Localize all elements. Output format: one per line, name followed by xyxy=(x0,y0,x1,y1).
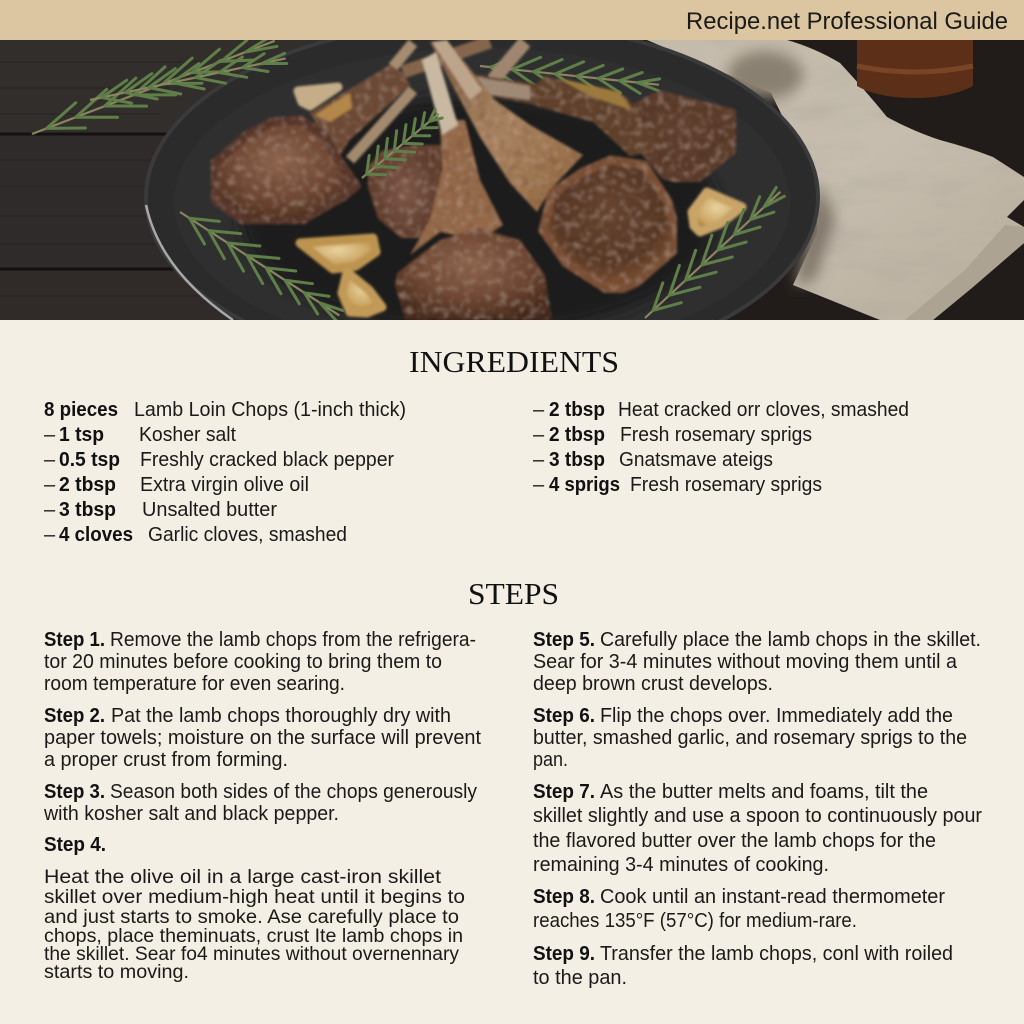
ingredient list: left column: 0.5 tsp xyxy=(59,449,120,471)
step 9 xyxy=(533,943,953,989)
header title: Recipe.net Professional Guide xyxy=(686,8,1008,35)
step 3: Step 3. xyxy=(44,781,105,803)
step 8: reaches 135°F (57°C) for medium-rare. xyxy=(533,910,857,932)
ingredient list: left column: Kosher salt xyxy=(139,424,236,446)
ingredient list: left column xyxy=(44,399,406,546)
step 6: pan. xyxy=(533,749,568,771)
step 4: skillet over medium-high heat until it begins to xyxy=(44,887,465,908)
step 2 xyxy=(44,705,481,771)
ingredient list: left column: – xyxy=(44,524,56,546)
ingredient list: left column: Lamb Loin Chops (1-inch thick) xyxy=(134,399,406,421)
step 6 xyxy=(533,705,967,771)
step 3: Season both sides of the chops generously xyxy=(110,781,477,803)
ingredient list: right column: – xyxy=(533,399,545,421)
step 4: Step 4. xyxy=(44,834,106,856)
step 6: Step 6. xyxy=(533,705,595,727)
ingredient list: left column: Unsalted butter xyxy=(142,499,277,521)
step 2: a proper crust from forming. xyxy=(44,749,288,771)
garlic cloves xyxy=(298,87,742,313)
chop A xyxy=(211,65,410,224)
step 4: chops, place theminuats, crust Ite lamb chops in xyxy=(44,926,463,947)
step 5: Carefully place the lamb chops in the skillet. xyxy=(600,629,981,651)
step 3 xyxy=(43,781,477,825)
ingredient list: left column: – xyxy=(44,449,56,471)
step 8 xyxy=(533,886,945,932)
ingredient list: left column: Garlic cloves, smashed xyxy=(148,524,347,546)
step 9: Transfer the lamb chops, conl with roiled xyxy=(600,943,953,965)
ingredient list: right column: – xyxy=(533,474,545,496)
step 2: Pat the lamb chops thoroughly dry with xyxy=(111,705,451,727)
lamb chops xyxy=(211,40,736,320)
step 4: and just starts to smoke. Ase carefully place to xyxy=(44,907,459,928)
step 8: Cook until an instant-read thermometer xyxy=(600,886,945,908)
panel: steps xyxy=(43,576,982,989)
step 1: Remove the lamb chops from the refrigera- xyxy=(110,629,476,651)
ingredient list: left column: 8 pieces xyxy=(44,399,118,421)
step 5: deep brown crust develops. xyxy=(533,673,773,695)
step 7: the flavored butter over the lamb chops for the xyxy=(533,830,936,852)
rosemary on top xyxy=(172,103,791,329)
ingredient list: left column: – xyxy=(44,474,56,496)
bones behind xyxy=(350,42,525,160)
chop C xyxy=(395,120,552,320)
step 9: to the pan. xyxy=(533,967,627,989)
step 1: room temperature for even searing. xyxy=(44,673,345,695)
step 9: Step 9. xyxy=(533,943,595,965)
ingredient list: right column xyxy=(533,399,909,496)
step 2: Step 2. xyxy=(44,705,105,727)
step 6: Flip the chops over. Immediately add the xyxy=(600,705,953,727)
step 4: starts to moving. xyxy=(44,962,189,983)
heading: steps: STEPS xyxy=(468,576,559,611)
ingredient list: left column: 1 tsp xyxy=(59,424,104,446)
step 5: Step 5. xyxy=(533,629,595,651)
step 2: paper towels; moisture on the surface will prevent xyxy=(44,727,481,749)
step 7: remaining 3-4 minutes of cooking. xyxy=(533,854,829,876)
step 7: skillet slightly and use a spoon to continuously pour xyxy=(533,805,982,827)
ingredient list: right column: Fresh rosemary sprigs xyxy=(630,474,822,496)
ingredient list: left column: Extra virgin olive oil xyxy=(140,474,309,496)
step 4 xyxy=(44,834,465,983)
ingredient list: right column: Gnatsmave ateigs xyxy=(619,449,773,471)
ingredient list: right column: 4 sprigs xyxy=(549,474,620,496)
step 4: the skillet. Sear fo4 minutes without overnennary xyxy=(44,944,459,965)
step 7 xyxy=(533,781,982,876)
ingredient list: left column: – xyxy=(44,424,56,446)
step 4: Heat the olive oil in a large cast-iron skillet xyxy=(44,867,442,888)
ingredient list: left column: 2 tbsp xyxy=(59,474,116,496)
step 8: Step 8. xyxy=(533,886,595,908)
step 6: butter, smashed garlic, and rosemary sprigs to the xyxy=(533,727,967,749)
ingredient list: right column: – xyxy=(533,449,545,471)
step 5 xyxy=(533,629,981,695)
rosemary sprigs behind xyxy=(27,27,661,148)
step 1: Step 1. xyxy=(44,629,105,651)
step 7: As the butter melts and foams, tilt the xyxy=(600,781,928,803)
ingredient list: right column: – xyxy=(533,424,545,446)
ingredient list: right column: Fresh rosemary sprigs xyxy=(620,424,812,446)
ingredient list: right column: 2 tbsp xyxy=(549,399,605,421)
heading: ingredients: INGREDIENTS xyxy=(409,344,619,379)
wooden table xyxy=(0,40,1024,320)
step 3: with kosher salt and black pepper. xyxy=(43,803,339,825)
ingredient list: left column: Freshly cracked black pepper xyxy=(140,449,394,471)
pepper mill xyxy=(857,40,973,98)
step 1: tor 20 minutes before cooking to bring them to xyxy=(44,651,442,673)
panel: ingredients xyxy=(44,344,909,546)
ingredient list: right column: Heat cracked orr cloves, smashed xyxy=(618,399,909,421)
plate xyxy=(144,40,820,320)
ingredient list: right column: 2 tbsp xyxy=(549,424,605,446)
header band xyxy=(0,0,1024,40)
step 1 xyxy=(44,629,476,695)
ingredient list: left column: 3 tbsp xyxy=(59,499,116,521)
hero photo: lamb chops on a black plate xyxy=(0,40,1024,320)
chop B xyxy=(368,145,441,238)
step 5: Sear for 3-4 minutes without moving them until a xyxy=(533,651,958,673)
step 7: Step 7. xyxy=(533,781,595,803)
chop E xyxy=(470,74,736,182)
chop D xyxy=(430,40,677,293)
ingredient list: left column: 4 cloves xyxy=(59,524,133,546)
linen towel xyxy=(647,40,1024,320)
ingredient list: left column: – xyxy=(44,499,56,521)
ingredient list: right column: 3 tbsp xyxy=(549,449,605,471)
